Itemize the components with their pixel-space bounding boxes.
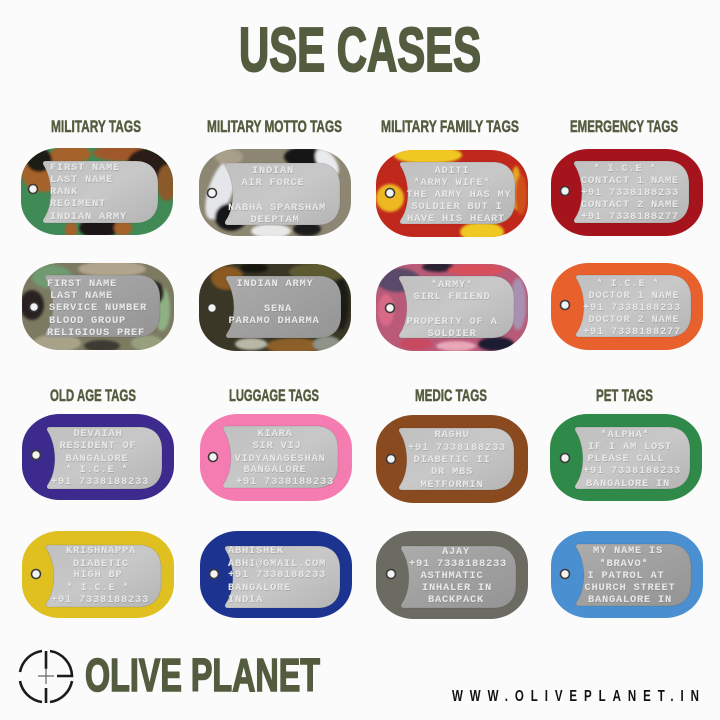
tag: grey and white camo, motto: INDIAN <box>252 165 294 177</box>
heading: military tags: MILITARY TAGS <box>51 117 141 136</box>
website url: WWW.OLIVEPLANET.IN <box>452 686 699 704</box>
tag: green and brown camo, first name: INDIAN ARMY <box>50 211 127 223</box>
tag: red, emergency: CONTACT 1 NAME <box>581 175 679 187</box>
tag: green, pet: +91 7338188233 <box>583 465 681 477</box>
tag: red, emergency <box>551 149 703 236</box>
tag: pink, luggage: VIDYANAGESHAN <box>234 453 326 465</box>
tag: grey, medic <box>376 531 528 619</box>
tag: light blue, pet: BANGALORE IN <box>588 594 672 606</box>
tag: brown, medic: METFORMIN <box>420 479 484 491</box>
tag: purple, old age: * I.C.E * <box>65 464 129 476</box>
tag: grey and white camo, motto: AIR FORCE <box>241 177 305 189</box>
tag: dark camo, motto <box>199 263 351 354</box>
tag: yellow, old age: KRISHNAPPA <box>66 545 136 557</box>
tag: pink and navy swirl, family: PROPERTY OF A <box>406 316 498 328</box>
tag: green, pet: IF I AM LOST <box>588 441 672 453</box>
tag: pink and navy swirl, family: GIRL FRIEND <box>413 291 491 303</box>
tag: yellow, old age: * I.C.E * <box>66 582 130 594</box>
tag: yellow, old age: +91 7338188233 <box>51 594 149 606</box>
tag: pink, luggage: +91 7338188233 <box>236 476 334 488</box>
tag: pink and navy swirl, family <box>376 262 528 351</box>
tag: light blue, pet: I PATROL AT <box>587 570 665 582</box>
tag: blue, luggage: ABHISHEK <box>228 545 284 557</box>
tag: brown, medic: RAGHU <box>434 429 470 441</box>
tag: red, emergency: +91 7338188233 <box>581 187 679 199</box>
tag: olive camo, first name: BLOOD GROUP <box>49 315 126 327</box>
tag: green, pet <box>550 414 702 501</box>
tag: green and brown camo, first name: RANK <box>50 186 78 198</box>
tag: green and brown camo, first name: LAST NAME <box>50 174 113 186</box>
tag: grey and white camo, motto: NABHA SPARSHAM <box>228 202 326 214</box>
tag: orange, emergency: * I.C.E * <box>596 278 660 290</box>
tag: brown, medic: DR MBS <box>431 466 473 478</box>
tag: yellow, old age: HIGH BP <box>73 569 123 581</box>
tag: orange, emergency <box>551 263 703 350</box>
tag: grey, medic: BACKPACK <box>428 594 484 606</box>
tag: orange, emergency: DOCTOR 1 NAME <box>588 290 680 302</box>
tag: pink, luggage: SIR VIJ <box>252 440 302 452</box>
tag: grey, medic: INHALER IN <box>422 582 492 594</box>
tag: blue, luggage: ABHI@GMAIL.COM <box>228 558 326 570</box>
tag: red, emergency: +91 7338188277 <box>581 211 679 223</box>
tag: red and yellow, family <box>376 146 528 242</box>
tag: olive camo, first name: LAST NAME <box>50 290 113 302</box>
tag: olive camo, first name: RELIGIOUS PREF <box>47 327 145 339</box>
tag: dark camo, motto: INDIAN ARMY <box>236 278 314 290</box>
tag: pink and navy swirl, family: SOLDIER <box>427 328 477 340</box>
tag: olive camo, first name: FIRST NAME <box>47 278 117 290</box>
tag: olive camo, first name <box>20 261 174 352</box>
tag: blue, luggage <box>200 531 352 618</box>
tag: brown, medic: +91 7338188233 <box>408 442 506 454</box>
tag: grey and white camo, motto: DEEPTAM <box>250 214 300 226</box>
heading: luggage tags: LUGGAGE TAGS <box>229 386 319 405</box>
tag: olive camo, first name: SERVICE NUMBER <box>49 302 147 314</box>
tag: light blue, pet: MY NAME IS <box>593 545 663 557</box>
tag: purple, old age <box>22 414 174 500</box>
heading: medic tags: MEDIC TAGS <box>415 386 487 405</box>
tag: pink, luggage: KIARA <box>257 428 293 440</box>
tag: red and yellow, family: HAVE HIS HEART <box>407 213 505 225</box>
heading: military family tags: MILITARY FAMILY TAGS <box>381 117 519 136</box>
logo icon: reticle <box>20 651 72 703</box>
tag: light blue, pet <box>551 531 703 618</box>
tag: red, emergency: * I.C.E * <box>593 163 657 175</box>
tag: green and brown camo, first name: FIRST NAME <box>50 162 120 174</box>
tag: purple, old age: BANGALORE <box>65 453 129 465</box>
tag: purple, old age: +91 7338188233 <box>51 476 149 488</box>
heading: pet tags: PET TAGS <box>596 386 653 405</box>
tag: green and brown camo, first name: REGIMENT <box>50 198 106 210</box>
tag: red and yellow, family: THE ARMY HAS MY <box>406 189 512 201</box>
tag: light blue, pet: *BRAVO* <box>599 558 649 570</box>
tag: blue, luggage: INDIA <box>228 594 263 606</box>
tag: purple, old age: DEVAIAH <box>73 428 123 440</box>
tag: orange, emergency: +91 7338188233 <box>583 302 681 314</box>
tag: dark camo, motto: PARAMO DHARMA <box>228 315 320 327</box>
tag: yellow, old age <box>22 531 174 618</box>
tag: grey, medic: AJAY <box>442 546 470 558</box>
tag: red, emergency: CONTACT 2 NAME <box>581 199 679 211</box>
tag: yellow, old age: DIABETIC <box>73 558 129 570</box>
tag: red and yellow, family: SOLDIER BUT I <box>411 201 503 213</box>
tag: brown, medic <box>376 415 528 503</box>
tag: green, pet: *ALPHA* <box>600 429 650 441</box>
tag: purple, old age: RESIDENT OF <box>59 440 137 452</box>
tag: pink, luggage <box>200 414 352 501</box>
tag: pink, luggage: BANGALORE <box>243 464 307 476</box>
heading: military motto tags: MILITARY MOTTO TAGS <box>207 117 342 136</box>
tag: grey, medic: +91 7338188233 <box>409 558 507 570</box>
tag: green and brown camo, first name <box>21 145 177 238</box>
logo wordmark: OLIVE PLANET <box>85 649 320 701</box>
tag: pink and navy swirl, family: *ARMY* <box>431 279 473 291</box>
tag: light blue, pet: CHURCH STREET <box>584 582 676 594</box>
title: USE CASES <box>239 16 481 85</box>
tag: orange, emergency: DOCTOR 2 NAME <box>588 314 680 326</box>
tag: red and yellow, family: *ARMY WIFE* <box>413 177 491 189</box>
tag: green, pet: PLEASE CALL <box>587 453 665 465</box>
tag: grey and white camo, motto <box>199 145 351 238</box>
tag: blue, luggage: BANGALORE <box>228 582 291 594</box>
tag: orange, emergency: +91 7338188277 <box>583 326 681 338</box>
heading: old age tags: OLD AGE TAGS <box>50 386 136 405</box>
tag: brown, medic: DIABETIC II <box>413 454 491 466</box>
tag: green, pet: BANGALORE IN <box>586 478 670 490</box>
tag: dark camo, motto: SENA <box>264 303 292 315</box>
tag: blue, luggage: +91 7338188233 <box>228 569 326 581</box>
tag: grey, medic: ASTHMATIC <box>420 570 484 582</box>
tag: red and yellow, family: ADITI <box>434 165 470 177</box>
